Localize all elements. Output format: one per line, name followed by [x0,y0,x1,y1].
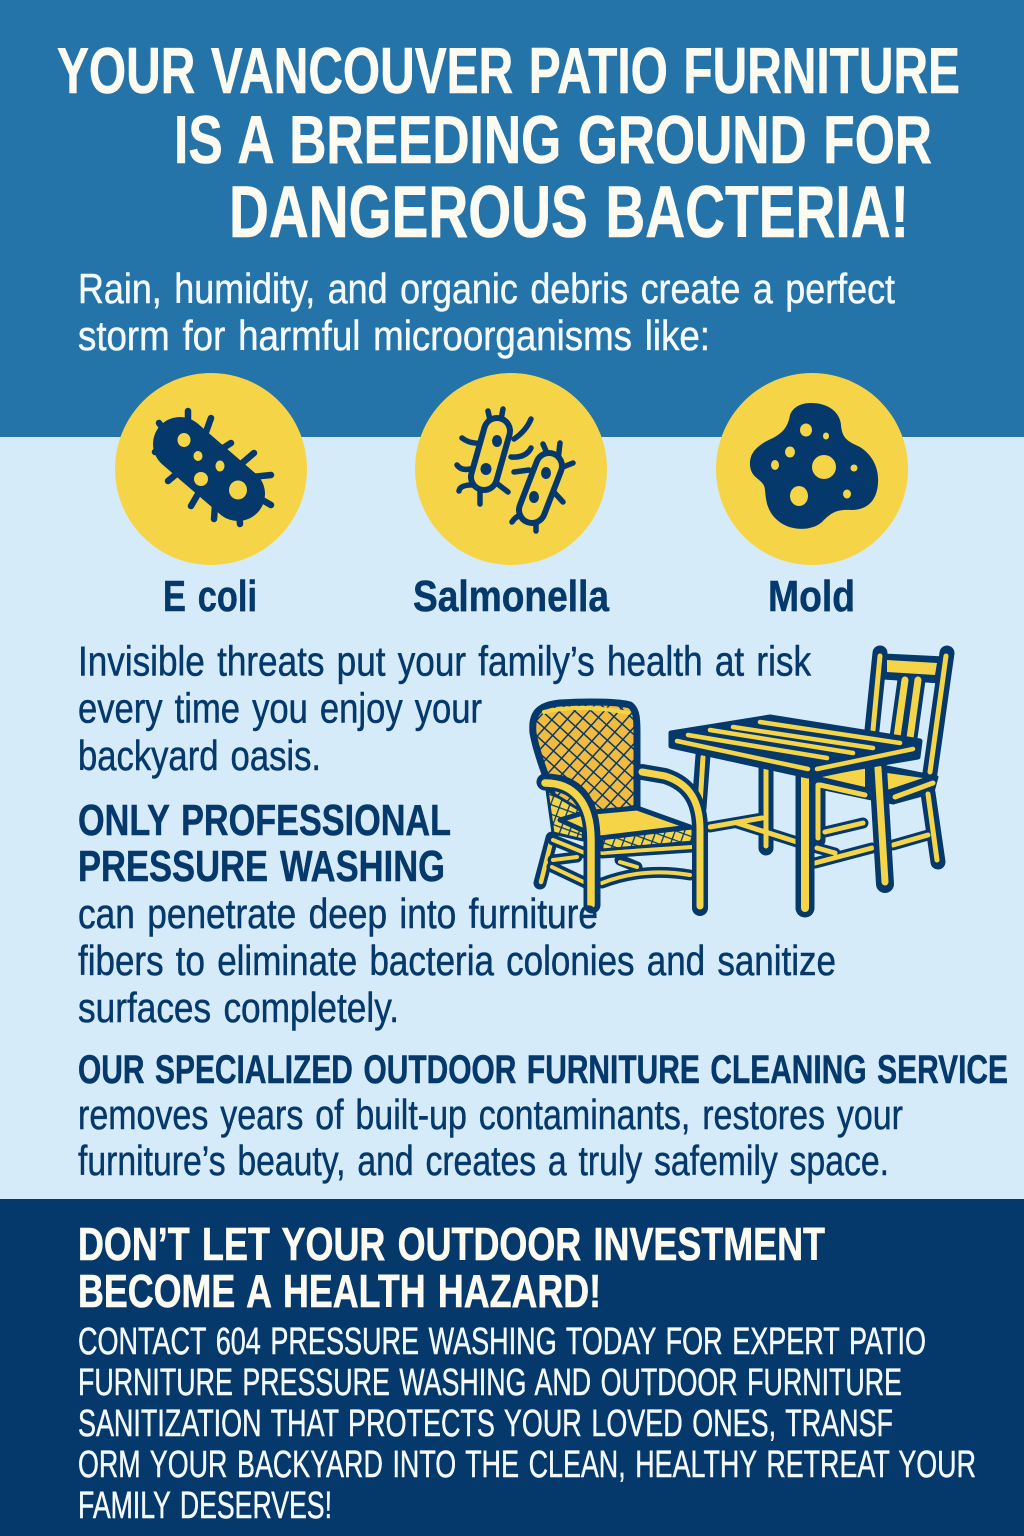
label: Mold: Mold [768,572,855,621]
text block: invisible threats: Invisible threats put your family’s health at risk [78,638,812,684]
intro text: storm for harmful microorganisms like: [78,312,710,359]
label: E coli: E coli [163,572,257,621]
text block: pressure washing benefit [78,890,836,1031]
icon: Mold blob [716,373,908,565]
footer heading: DON’T LET YOUR OUTDOOR INVESTMENT [78,1218,825,1270]
panel: header band [0,0,1024,437]
text block: service description [78,1091,903,1184]
label: Salmonella: Salmonella [413,572,609,621]
illustration: patio furniture [533,653,947,908]
side chair [815,653,947,862]
footer call to action: FAMILY DESERVES! [78,1485,332,1527]
text block: invisible threats: every time you enjoy your [78,684,482,732]
title [57,34,960,253]
heading: only professional pressure washing [78,796,451,891]
table [671,717,920,908]
text block: pressure washing benefit: surfaces completely. [78,984,399,1031]
text block: pressure washing benefit: fibers to eliminate bacteria colonies and sanitize [78,937,836,984]
intro text [78,265,895,359]
icon: Salmonella bacteria [415,373,607,565]
panel: footer band [0,1199,1024,1536]
wicker armchair [533,702,700,908]
footer call to action [78,1321,976,1527]
intro text: Rain, humidity, and organic debris create a perfect [78,265,895,312]
text block: invisible threats: backyard oasis. [78,732,321,779]
text block: invisible threats [78,638,812,779]
icon: E coli bacterium [115,373,307,565]
footer heading [78,1218,825,1317]
text block: pressure washing benefit: can penetrate deep into furniture [78,890,598,937]
heading: only professional pressure washing: ONLY PROFESSIONAL [78,796,451,845]
heading: only professional pressure washing: PRESSURE WASHING [78,842,445,891]
footer heading: BECOME A HEALTH HAZARD! [78,1265,601,1317]
